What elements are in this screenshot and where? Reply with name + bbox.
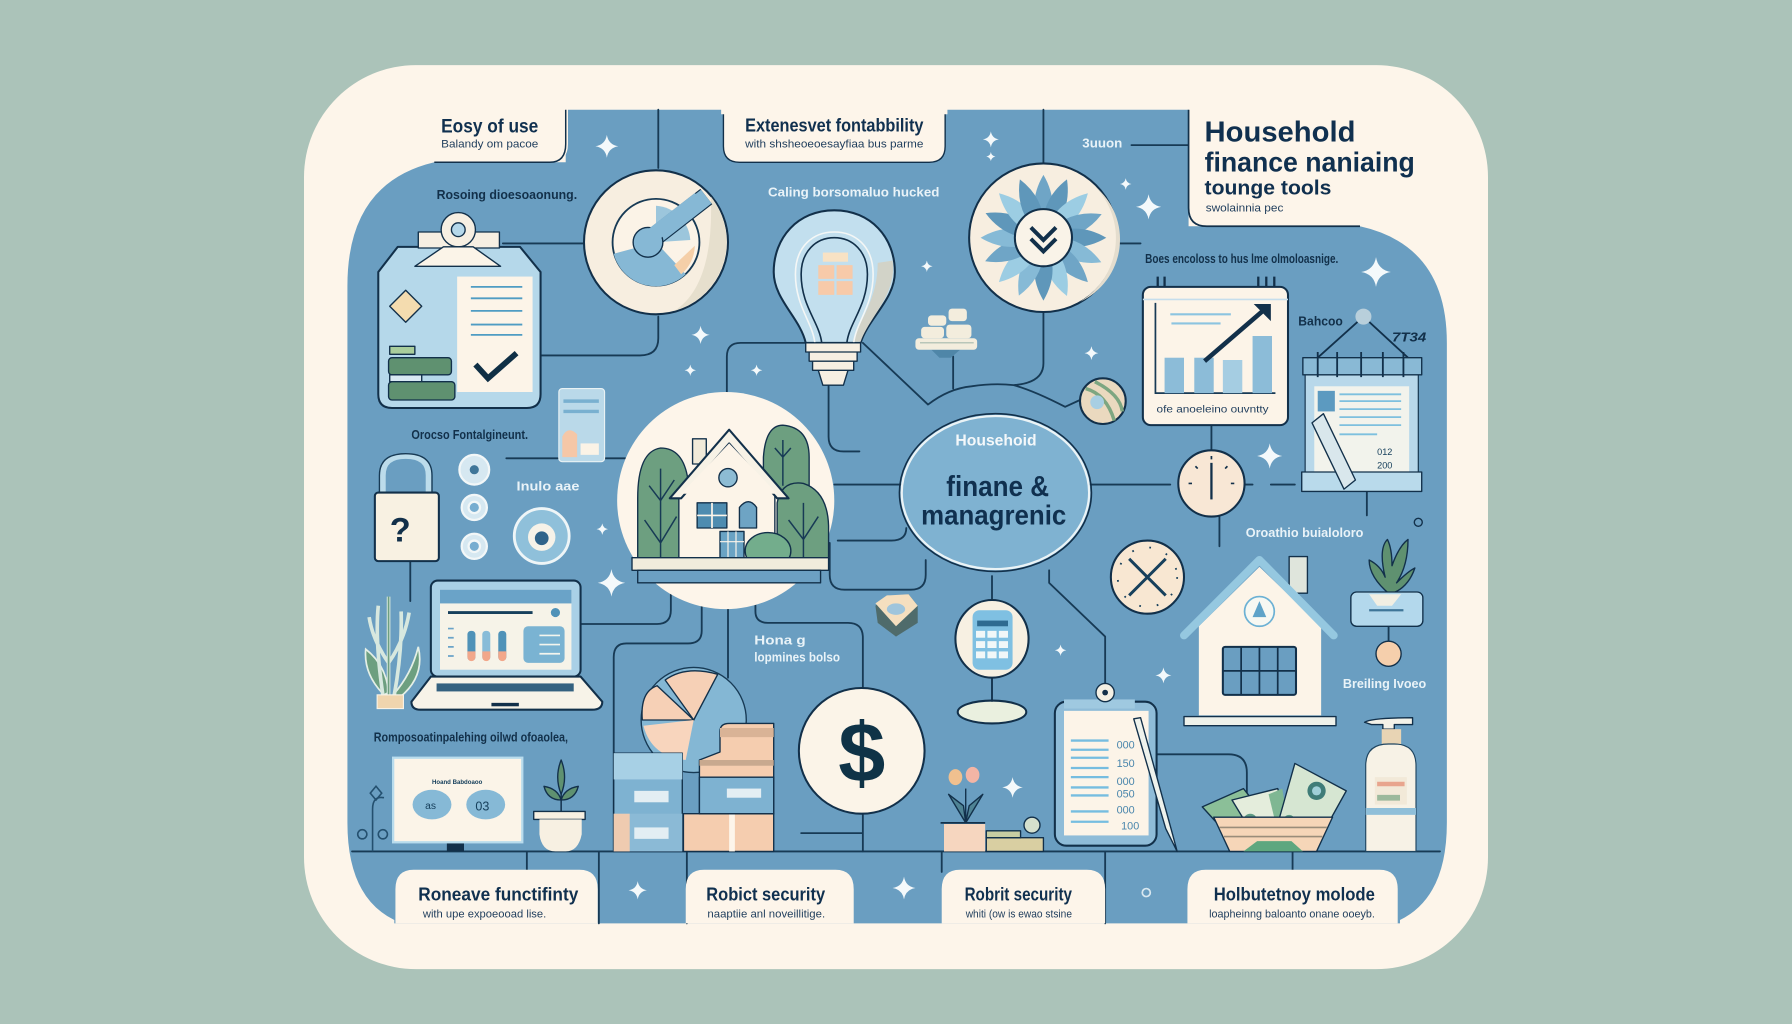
title card <box>1189 110 1417 226</box>
icon: ID card <box>559 389 605 462</box>
icon: padlock <box>375 454 439 561</box>
label texts: lopmines bolso <box>754 651 840 665</box>
bottom card: robust security two: Robrit security <box>965 884 1073 905</box>
icon: plant left <box>365 597 420 709</box>
icon: potted sapling <box>534 760 585 851</box>
icon: checklist: 050 <box>1117 789 1135 801</box>
icon: flower pot and stack <box>941 767 1043 851</box>
icon: hanging notepad: 012 <box>1377 447 1392 457</box>
icon: stone stack <box>875 594 918 637</box>
top card: ease of use: Balandy om pacoe <box>441 138 538 150</box>
icon: small stand <box>358 786 387 851</box>
icon: calculator circle <box>955 600 1029 723</box>
icon: big house <box>1184 557 1336 726</box>
label texts: Romposoatinpalehing oilwd ofoaolea, <box>374 731 568 745</box>
cream frame <box>304 65 1488 969</box>
icon: pie chart <box>641 667 746 773</box>
label texts: Hona g <box>754 634 806 648</box>
icon: monitor: Hoand Babdoaoo <box>432 779 482 786</box>
icon: flower badge <box>969 163 1120 312</box>
icon: monitor: 03 <box>475 799 489 813</box>
title card: finance naniaing <box>1205 146 1415 177</box>
icon: badges <box>459 455 489 559</box>
label texts: Inulo aae <box>517 479 579 493</box>
center bubble <box>899 414 1091 571</box>
icon: cross dial <box>1111 541 1184 614</box>
top card: extensive portability: Extenesvet fontabbility <box>745 114 924 135</box>
icon: file boxes <box>614 723 774 851</box>
sparkles <box>595 131 1391 899</box>
icon: hanging notepad: 200 <box>1377 461 1392 471</box>
label texts: 7T34 <box>1392 331 1426 345</box>
icon: checklist: 000 <box>1117 776 1135 788</box>
icon: growth chart: ofe anoeleino ouvntty <box>1157 405 1270 416</box>
icon: stones <box>915 309 977 358</box>
top card: ease of use <box>391 107 568 171</box>
icon: target disc <box>514 509 569 563</box>
blue panel <box>347 110 1447 923</box>
center bubble: Househoid <box>955 433 1037 450</box>
icon: light bulb <box>774 210 895 385</box>
bottom card: robust security two: whiti (ow is ewao stsine <box>965 909 1072 921</box>
label texts: 3uuon <box>1082 136 1122 150</box>
icon: growth chart <box>1143 277 1288 425</box>
icon: money basket <box>1202 763 1346 851</box>
connector lines <box>352 110 1440 923</box>
icon: clipboard <box>378 213 541 408</box>
center house circle <box>617 392 834 609</box>
icon: clock <box>1178 450 1245 517</box>
label texts: Boes encoloss to hus lme olmoloasnige. <box>1145 252 1338 266</box>
bottom card: robust security two <box>942 870 1105 923</box>
bottom card: removal functionality: with upe expoeooad lise. <box>422 909 546 921</box>
title card: swolainnia pec <box>1206 202 1284 214</box>
icon: small ball <box>1080 378 1126 424</box>
icon: hanging notepad <box>1302 309 1422 491</box>
bottom card: robust security: naaptiie anl noveillitige. <box>707 909 825 921</box>
icon: dollar coin <box>799 688 925 814</box>
icon: monitor <box>393 758 522 851</box>
label texts <box>374 136 1427 745</box>
label texts: Orocso Fontalgineunt. <box>411 428 528 442</box>
bottom card: removal functionality: Roneave functifinty <box>418 884 579 905</box>
label texts: Oroathio buialoloro <box>1246 526 1364 540</box>
icon: checklist: 150 <box>1117 758 1135 770</box>
center bubble: finane & <box>946 471 1049 503</box>
icon: monitor: as <box>425 801 436 812</box>
title card: tounge tools <box>1205 176 1331 199</box>
bottom card: household module: loapheinng baloanto onane ooeyb. <box>1209 909 1375 921</box>
title card: Household <box>1205 117 1355 149</box>
bottom card: robust security: Robict security <box>706 884 826 905</box>
label texts: Caling borsomaluo hucked <box>768 186 939 200</box>
label texts: Bahcoo <box>1298 315 1343 329</box>
icon: lotion bottle <box>1365 718 1416 851</box>
bottom card: robust security <box>686 870 854 923</box>
center bubble: managrenic <box>921 500 1066 531</box>
icon: padlock: ? <box>390 512 411 550</box>
icon: dollar coin: $ <box>838 705 885 800</box>
icon: laptop <box>411 581 602 710</box>
bottom card: removal functionality <box>395 870 598 923</box>
icon: checklist <box>1055 683 1177 851</box>
icon: checklist: 000 <box>1117 805 1135 817</box>
icon: checklist: 100 <box>1121 821 1139 833</box>
top card: ease of use: Eosy of use <box>441 116 538 138</box>
top card: extensive portability: with shsheoeoesayfiaa bus parme <box>744 138 923 150</box>
top card: extensive portability <box>721 107 947 162</box>
bottom card: household module <box>1187 870 1398 923</box>
icon: wall planter <box>1351 518 1423 666</box>
icon: checklist: 000 <box>1117 740 1135 752</box>
icon: gauge <box>584 170 728 314</box>
bottom card: household module: Holbutetnoy molode <box>1214 884 1375 905</box>
label texts: Breiling Ivoeo <box>1343 677 1427 691</box>
label texts: Rosoing dioesoaonung. <box>437 188 577 202</box>
